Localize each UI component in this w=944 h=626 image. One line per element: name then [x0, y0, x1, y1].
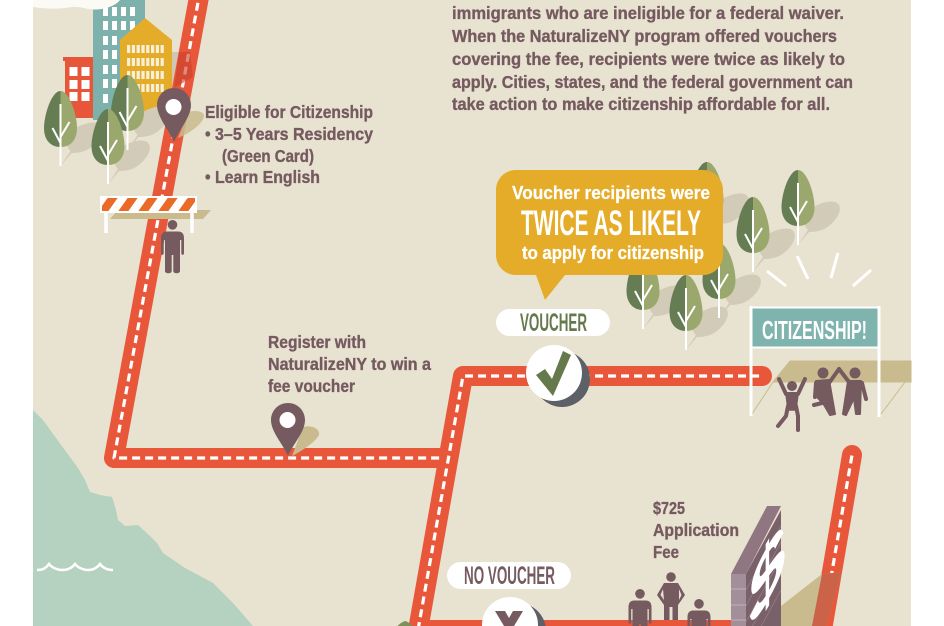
text: register — [268, 332, 431, 396]
text: explanation paragraph: When the NaturalizeNY program offered vouchers — [452, 26, 837, 46]
text: eligible for citizenship: (Green Card) — [222, 146, 314, 166]
citizenship finish line: CITIZENSHIP! — [762, 315, 867, 345]
celebration rays — [767, 253, 871, 286]
callout: twice as likely — [496, 170, 723, 300]
pin: register — [271, 403, 319, 456]
pin: eligibility — [157, 88, 204, 142]
icon: X mark — [482, 597, 546, 626]
trees: city — [44, 75, 169, 184]
text: explanation paragraph — [452, 3, 853, 114]
label: voucher: VOUCHER — [520, 309, 587, 337]
cloud — [33, 0, 120, 10]
citizenship finish line — [751, 306, 911, 417]
text: register: Register with — [268, 332, 366, 352]
icon: water wave — [37, 564, 113, 570]
people at wall — [628, 572, 710, 626]
text: explanation paragraph: covering the fee, recipients were twice as likely to — [452, 49, 845, 69]
small tree at bottom — [396, 621, 414, 626]
icon: check mark — [526, 345, 590, 407]
text: application fee: Application — [653, 520, 739, 540]
callout: twice as likely: Voucher recipients were — [512, 183, 710, 203]
text: eligible for citizenship: Eligible for Citizenship — [205, 102, 373, 122]
text: eligible for citizenship: • 3–5 Years Residency — [205, 124, 373, 144]
text: explanation paragraph: immigrants who are ineligible for a federal waiver. — [452, 3, 844, 23]
shadow on road near buildings — [174, 52, 193, 88]
red building — [63, 57, 93, 118]
text: application fee: $725 — [653, 498, 685, 518]
city buildings — [63, 0, 180, 120]
roadblock barrier — [97, 196, 211, 233]
callout: twice as likely: TWICE AS LIKELY — [521, 204, 701, 243]
callout: twice as likely: to apply for citizenship — [522, 243, 704, 263]
celebrating people — [778, 368, 866, 430]
sea with coastline — [33, 410, 253, 626]
text: explanation paragraph: apply. Cities, states, and the federal government can — [452, 72, 853, 92]
text: eligible for citizenship — [205, 102, 373, 187]
text: register: fee voucher — [268, 376, 355, 396]
teal tower — [93, 0, 145, 120]
label: no voucher: NO VOUCHER — [464, 562, 555, 590]
text: eligible for citizenship: • Learn English — [205, 167, 320, 187]
yellow building — [120, 18, 172, 119]
text: explanation paragraph: take action to make citizenship affordable for all. — [452, 94, 830, 114]
text: application fee — [653, 498, 739, 562]
fee wall — [731, 497, 842, 626]
person at barrier — [161, 220, 184, 273]
label: no voucher — [447, 562, 571, 590]
text: application fee: Fee — [653, 542, 679, 562]
road — [114, 0, 852, 626]
text: register: NaturalizeNY to win a — [268, 354, 431, 374]
trees: voucher route — [626, 162, 840, 350]
building shadow — [172, 52, 180, 90]
label: voucher — [496, 309, 610, 337]
